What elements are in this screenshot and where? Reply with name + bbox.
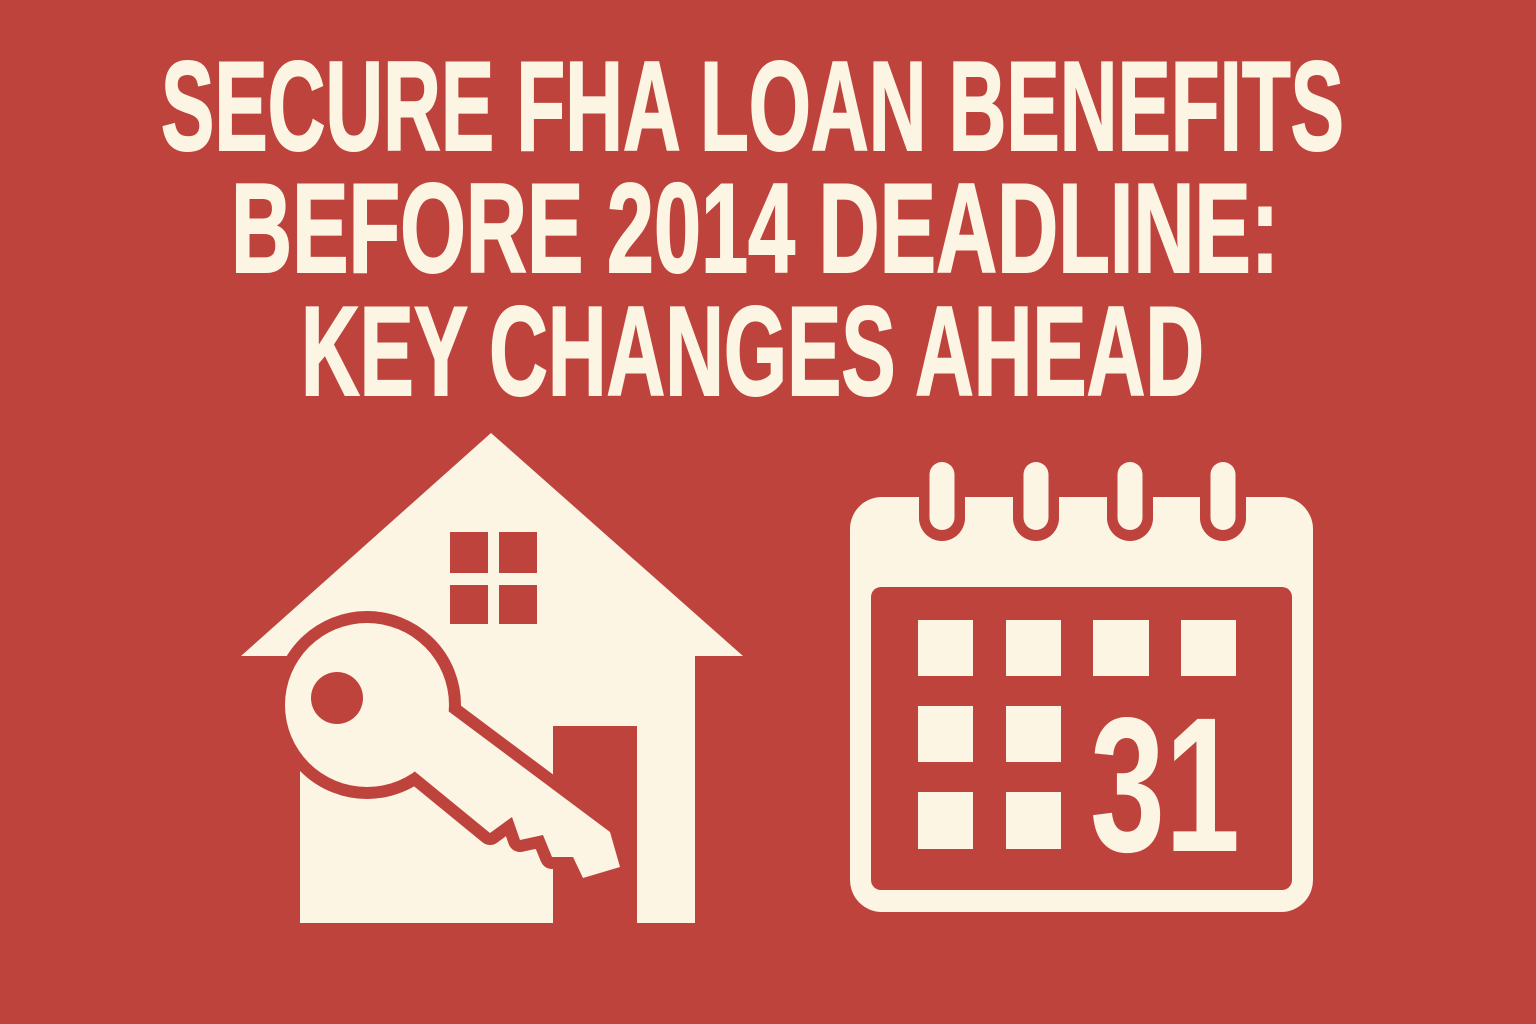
icon: house with key [241,433,743,923]
door [553,726,637,923]
house body [241,433,743,923]
day grid [918,620,1236,849]
key [285,623,620,878]
date number: 31 [1090,677,1240,892]
title [161,35,1344,422]
icon: calendar [850,462,1313,912]
rings [919,462,1246,541]
window [450,532,537,624]
